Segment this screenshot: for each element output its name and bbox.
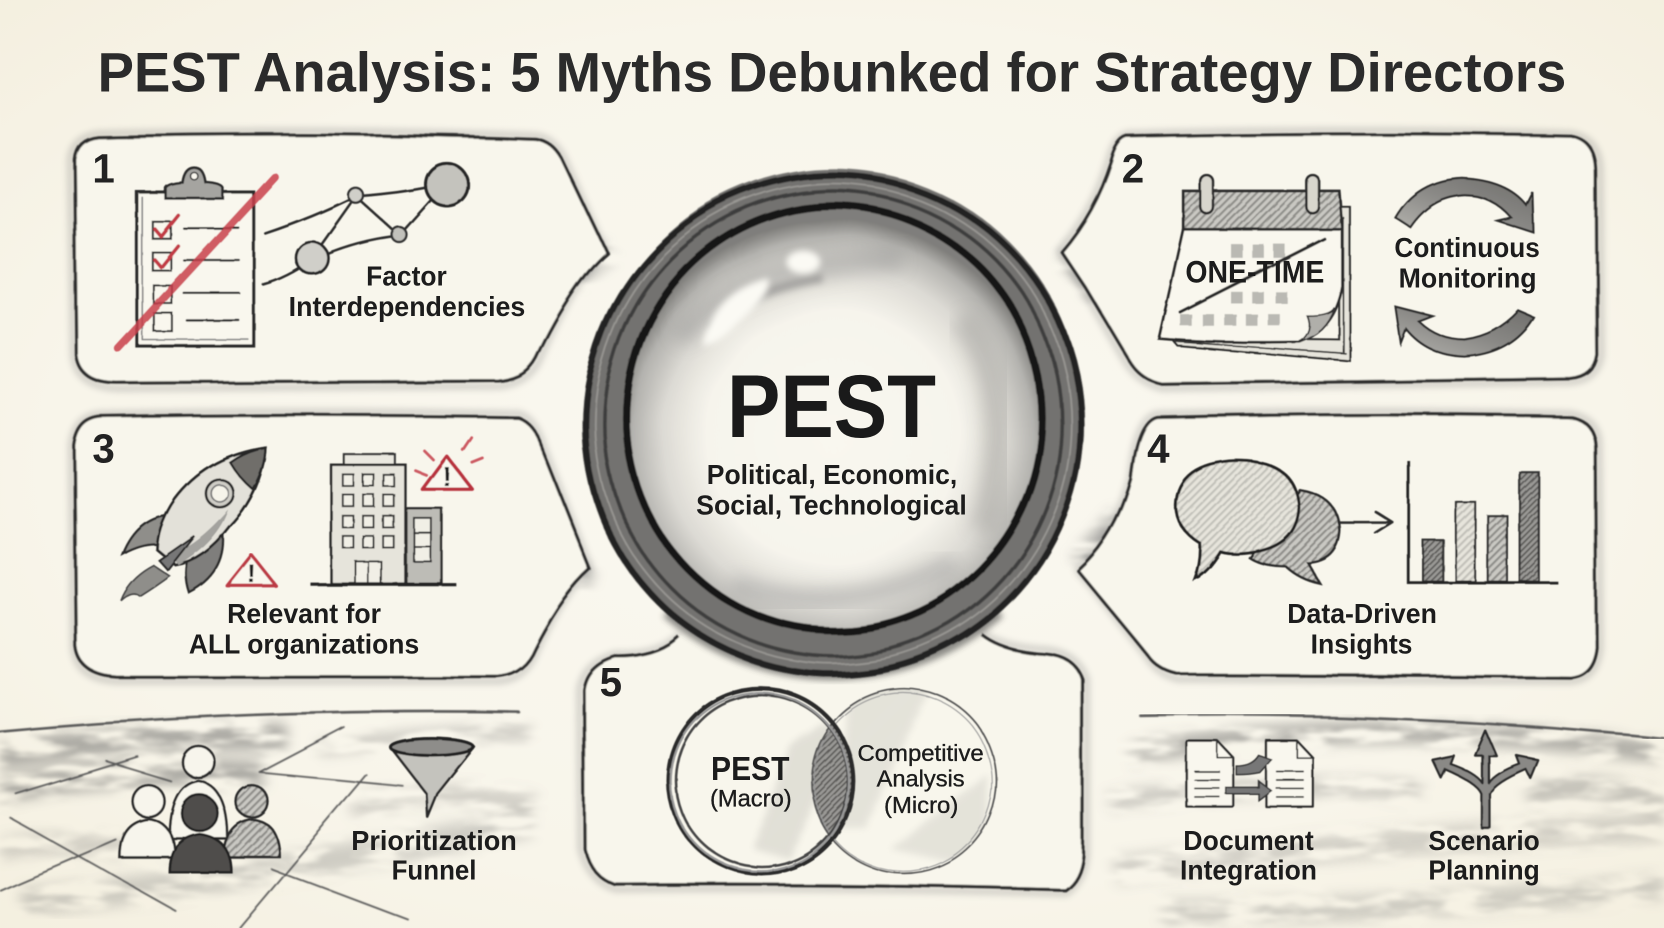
- icon: stakeholder group: [120, 746, 280, 872]
- ground shading: bottom left: [0, 712, 536, 926]
- label: factor interdependencies: [289, 260, 525, 322]
- label: factor interdependencies: Factor: [366, 260, 447, 291]
- icon: one-time calendar: [1159, 175, 1350, 361]
- icon: warning triangle with rays: !: [442, 461, 451, 492]
- panel: myth 3: [71, 412, 591, 681]
- label: factor interdependencies: Interdependencies: [289, 291, 525, 322]
- label: relevant for all organizations: [189, 598, 419, 660]
- venn diagram: [669, 679, 996, 873]
- arrow: conversation to data: [1339, 511, 1392, 533]
- label: document integration: [1180, 825, 1317, 886]
- section: prioritization funnel: [120, 739, 517, 886]
- central PEST lens: [585, 175, 1081, 674]
- title: PEST Analysis: 5 Myths Debunked for Strategy Directors: [98, 41, 1566, 103]
- label: relevant for all organizations: ALL organizations: [189, 629, 419, 660]
- section: scenario planning: [1428, 731, 1540, 886]
- label: prioritization funnel: Prioritization: [351, 825, 517, 856]
- label: document integration: Integration: [1180, 855, 1317, 886]
- icon: continuous cycle arrows: [1395, 178, 1533, 357]
- ring shadow: [669, 610, 998, 672]
- outer ring: [585, 175, 1081, 674]
- label: relevant for all organizations: Relevant for: [227, 598, 381, 629]
- venn label: pest macro: (Macro): [710, 785, 792, 812]
- number 3: 3: [92, 426, 115, 472]
- icon: warning triangle with rays: [416, 437, 483, 492]
- label: continuous monitoring: Continuous: [1394, 232, 1540, 263]
- PEST subtitle: [696, 459, 967, 521]
- bar chart: [1408, 461, 1558, 583]
- label: scenario planning: Scenario: [1428, 825, 1540, 856]
- venn label: competitive analysis micro: [857, 740, 984, 818]
- label: prioritization funnel: [351, 825, 517, 886]
- icon: corporate building: [311, 454, 456, 585]
- label: continuous monitoring: Monitoring: [1399, 263, 1537, 294]
- venn label: pest macro: PEST: [711, 750, 790, 787]
- number 4: 4: [1147, 426, 1170, 472]
- label: document integration: Document: [1183, 825, 1314, 856]
- icon: speech bubbles: [1176, 461, 1339, 584]
- icon: linked documents: [1186, 741, 1313, 806]
- panel: myth 1: [70, 131, 607, 388]
- venn label: pest macro: [710, 750, 792, 812]
- icon: funnel: [391, 739, 474, 817]
- venn label: competitive analysis micro: (Micro): [884, 792, 958, 818]
- venn label: competitive analysis micro: Analysis: [877, 765, 965, 791]
- connector smudges: [557, 250, 1125, 578]
- number 2: 2: [1122, 146, 1144, 192]
- icon: warning triangle small: !: [247, 561, 256, 589]
- lens highlights: [703, 250, 820, 345]
- panel: myth 2: [1059, 131, 1601, 388]
- icon: diverging arrows: [1433, 731, 1538, 828]
- panel: myth 4: [1077, 411, 1600, 681]
- PEST subtitle: Political, Economic,: [707, 459, 957, 490]
- number 1: 1: [92, 146, 115, 192]
- label: scenario planning: Planning: [1428, 855, 1540, 886]
- label: data-driven insights: Insights: [1311, 629, 1412, 660]
- text: one-time: ONE-TIME: [1185, 253, 1324, 289]
- icon: rocket with warning: [121, 448, 265, 601]
- icon: factor network: [263, 163, 468, 284]
- icon: crossed-out checklist clipboard: [118, 168, 275, 348]
- label: continuous monitoring: [1394, 232, 1540, 294]
- icon: warning triangle small: [227, 555, 276, 589]
- section: document integration: [1180, 741, 1317, 886]
- ground shading: bottom right: [1109, 715, 1664, 913]
- label: data-driven insights: Data-Driven: [1287, 598, 1437, 629]
- panel: myth 5: [579, 632, 1087, 894]
- venn label: competitive analysis micro: Competitive: [857, 740, 984, 766]
- label: scenario planning: [1428, 825, 1540, 886]
- PEST heading: PEST: [727, 356, 936, 456]
- PEST subtitle: Social, Technological: [696, 490, 967, 521]
- number 5: 5: [600, 659, 622, 705]
- label: prioritization funnel: Funnel: [392, 855, 477, 886]
- label: data-driven insights: [1287, 598, 1437, 660]
